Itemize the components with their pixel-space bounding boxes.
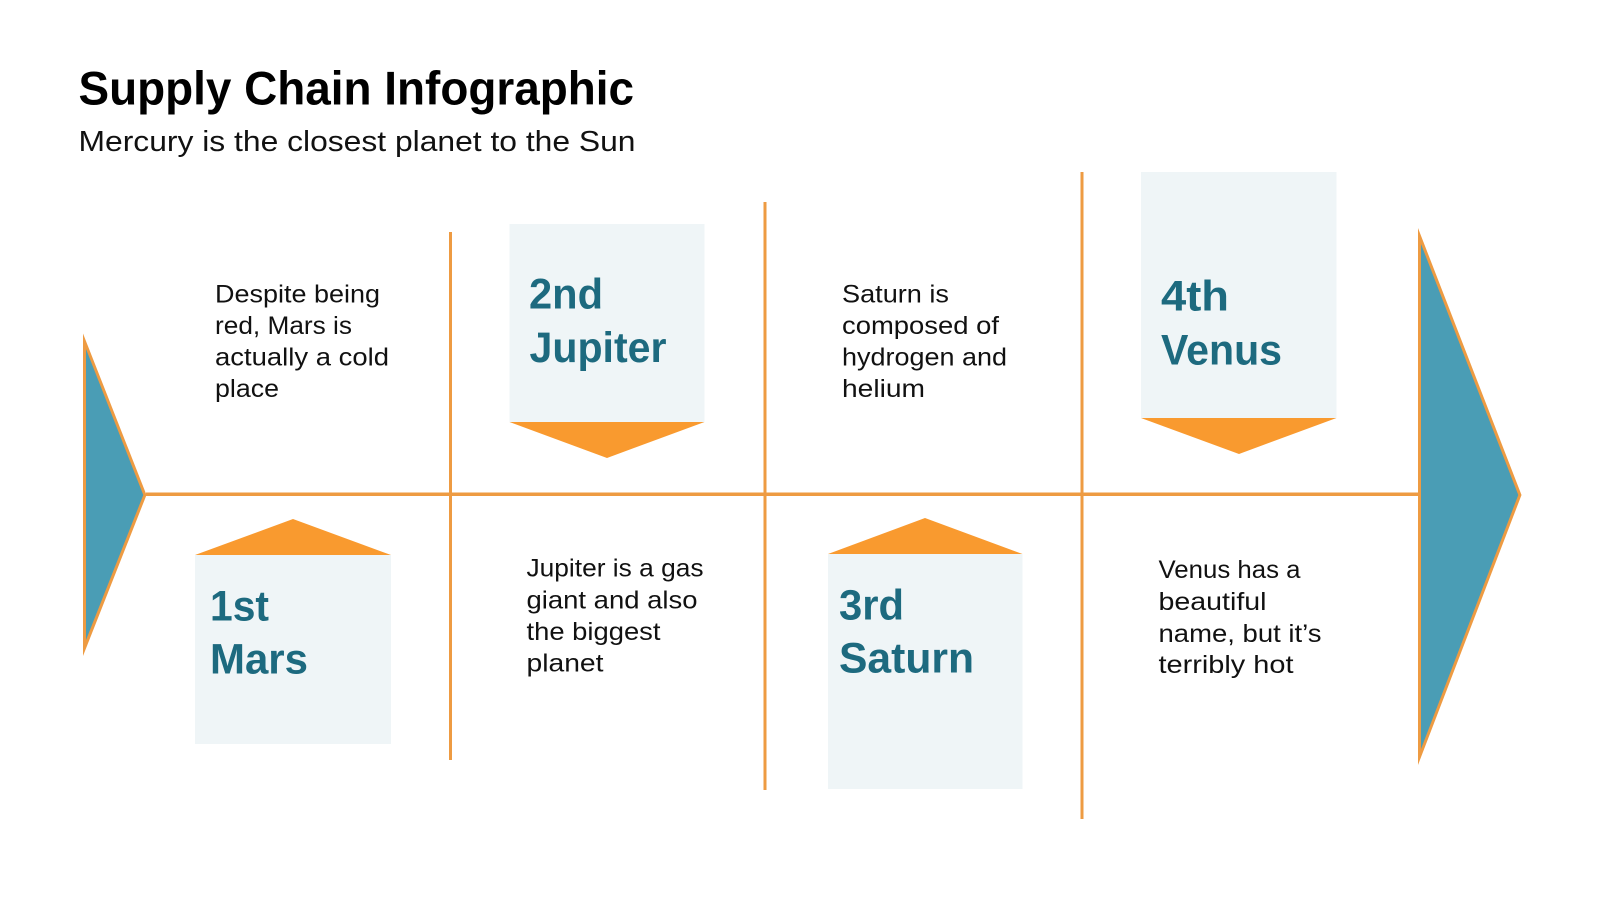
heading: 4th Venus [1161, 272, 1282, 374]
text: Venus description: name, but it’s [1158, 620, 1322, 648]
heading: 1st Mars [210, 582, 308, 684]
arrow: tail [83, 334, 146, 656]
text: Mars description [215, 280, 389, 403]
pointer: up triangle [195, 519, 391, 555]
heading: 1st Mars: 1st [210, 582, 269, 630]
text: Saturn description: composed of [842, 312, 999, 340]
card background [1141, 172, 1336, 418]
card background [195, 555, 391, 744]
subtitle: Mercury is the closest planet to the Sun [78, 126, 636, 158]
heading: 4th Venus: 4th [1161, 272, 1229, 320]
text: Jupiter description [526, 554, 704, 678]
text: Jupiter description: giant and also [526, 586, 698, 614]
text: Jupiter description: the biggest [526, 618, 661, 646]
heading: 3rd Saturn: 3rd [839, 582, 904, 630]
pointer: up triangle [828, 518, 1022, 554]
text: Venus description: beautiful [1158, 588, 1266, 616]
divider: third [1080, 172, 1084, 819]
heading: 2nd Jupiter: Jupiter [530, 324, 667, 372]
card background [828, 554, 1022, 789]
panel: 3rd Saturn [828, 518, 1022, 789]
text: Venus description: terribly hot [1158, 651, 1294, 679]
pointer: down triangle [1141, 418, 1336, 454]
text: Mars description: Despite being [215, 280, 380, 308]
text: Mars description: actually a cold [215, 344, 389, 372]
text: Saturn description: Saturn is [842, 280, 949, 308]
heading: 1st Mars: Mars [210, 636, 308, 684]
heading: 2nd Jupiter: 2nd [529, 270, 603, 318]
text: Saturn description [842, 280, 1007, 403]
heading: 3rd Saturn: Saturn [839, 634, 974, 682]
panel: 2nd Jupiter [510, 224, 704, 458]
panel: 1st Mars [195, 519, 391, 744]
text: Mars description: red, Mars is [215, 312, 352, 340]
text: Jupiter description: Jupiter is a gas [526, 554, 704, 582]
text: Jupiter description: planet [526, 650, 604, 678]
text: Venus description: Venus has a [1158, 556, 1301, 584]
text: Mars description: place [215, 375, 279, 403]
divider: second [764, 202, 766, 790]
text: Saturn description: hydrogen and [842, 344, 1007, 372]
heading: 4th Venus: Venus [1161, 326, 1282, 374]
text: Saturn description: helium [842, 375, 925, 403]
heading: 3rd Saturn [839, 582, 974, 682]
title: Supply Chain Infographic [78, 62, 634, 114]
heading: 2nd Jupiter [529, 270, 667, 372]
text: Venus description [1158, 556, 1322, 679]
arrow: head [1418, 228, 1522, 765]
fishbone spine [146, 492, 1421, 496]
pointer: down triangle [510, 422, 704, 458]
panel: 4th Venus [1141, 172, 1336, 454]
card background [510, 224, 704, 422]
divider: first [449, 232, 452, 760]
